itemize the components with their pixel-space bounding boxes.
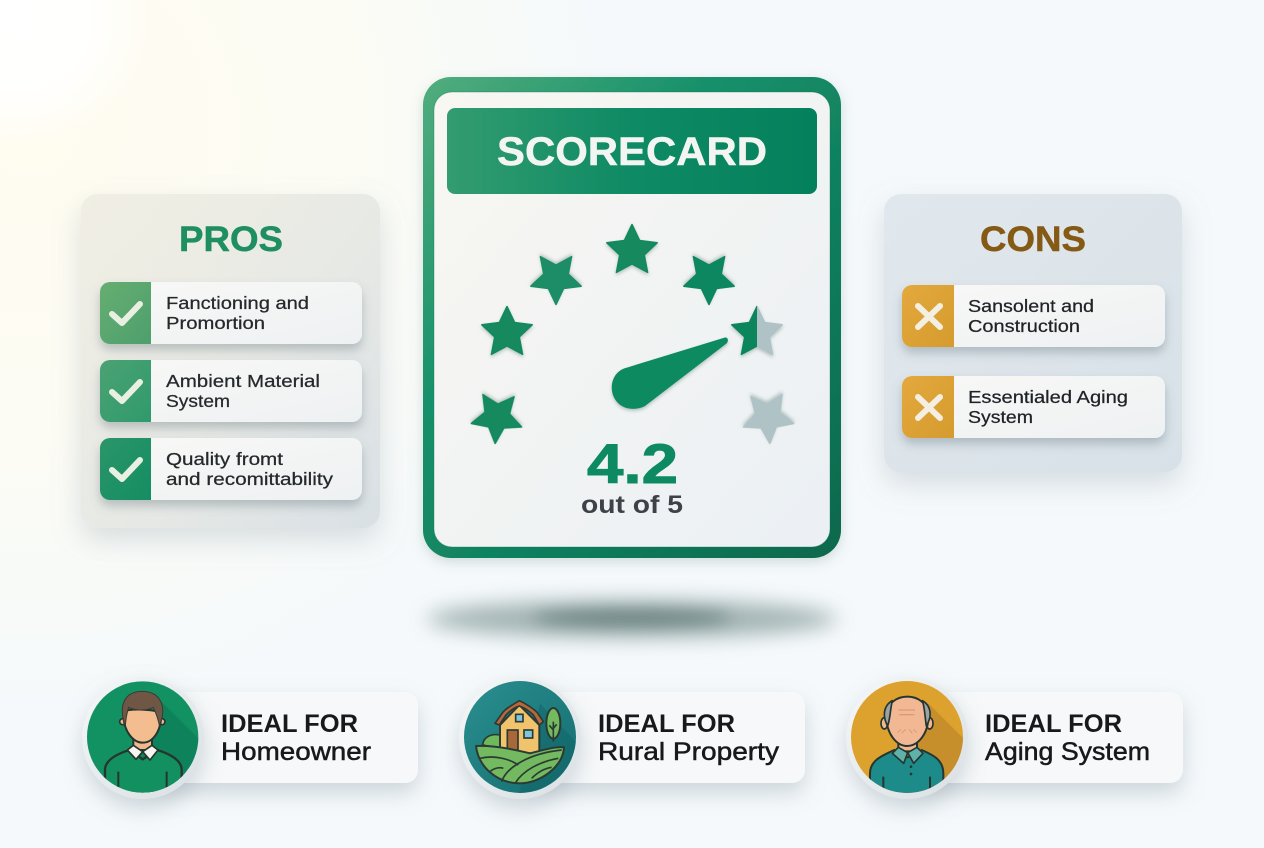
gauge needle (612, 337, 728, 409)
ideal for: rural property (459, 677, 805, 803)
icon: older person avatar (851, 681, 963, 793)
score caption: out of 5 (581, 491, 683, 519)
label: IDEAL FOR (598, 710, 735, 738)
pro item 2 (100, 360, 362, 422)
pro item 3: Quality fromt (166, 449, 283, 469)
label: IDEAL FOR (221, 710, 358, 738)
label: Rural Property (598, 738, 780, 766)
header banner (447, 108, 817, 194)
con item 1: Sansolent and (968, 296, 1094, 316)
panel: scorecard (423, 77, 841, 558)
header banner: SCORECARD (497, 130, 767, 174)
pro item 2: System (166, 391, 230, 411)
con item 2 (902, 376, 1165, 438)
panel: pros (81, 194, 380, 528)
pro item 2: Ambient Material (166, 371, 320, 391)
label: Homeowner (221, 738, 371, 766)
heading: pros: PROS (179, 220, 283, 259)
ideal for: aging system (846, 677, 1183, 803)
pro item 3 (100, 438, 362, 500)
icon: rural property farmhouse (464, 681, 576, 793)
label: IDEAL FOR (985, 710, 1122, 738)
floating shadow beneath scorecard (427, 600, 837, 638)
score value: 4.2 (587, 432, 678, 495)
heading: cons: CONS (980, 220, 1086, 259)
con item 1: Construction (968, 316, 1080, 336)
con item 2: Essentialed Aging (968, 387, 1128, 407)
ideal for: homeowner (82, 677, 418, 803)
pro item 1: Fanctioning and (166, 293, 309, 313)
star gauge (470, 224, 795, 445)
pro item 1 (100, 282, 362, 344)
pro item 3: and recomittability (166, 469, 333, 489)
label: Aging System (985, 738, 1150, 766)
con item 1 (902, 285, 1165, 347)
panel: cons (884, 194, 1182, 472)
icon: homeowner avatar (87, 681, 198, 793)
pro item 1: Promortion (166, 313, 265, 333)
con item 2: System (968, 407, 1033, 427)
